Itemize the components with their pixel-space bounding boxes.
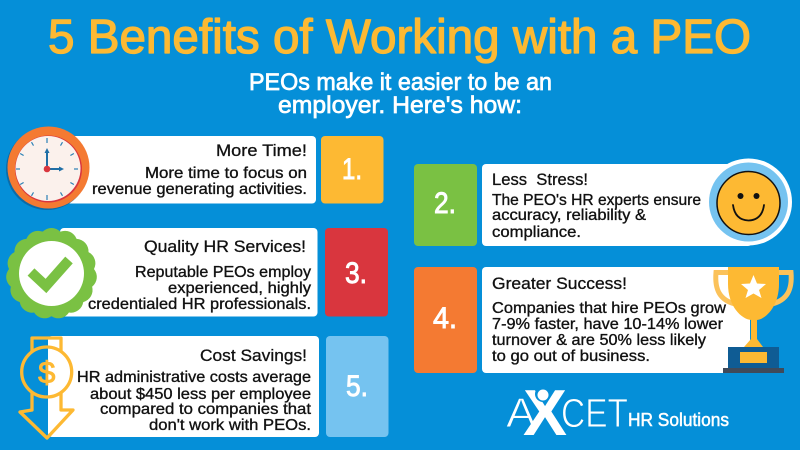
logo: Axcet HR Solutions: CET	[561, 390, 628, 436]
text: quality HR body: experienced, highly	[168, 280, 311, 297]
subtitle	[249, 69, 552, 119]
number box 5	[326, 336, 388, 437]
panel: greater success	[482, 267, 791, 373]
logo: Axcet HR Solutions: X	[523, 376, 567, 449]
text: cost savings body: compared to companies that	[100, 401, 312, 418]
number box 1	[321, 136, 384, 204]
panel: quality HR services	[4, 227, 317, 321]
panel: more time	[6, 126, 316, 210]
logo: Axcet HR Solutions: HR Solutions	[628, 410, 729, 430]
text: more time body: revenue generating activities.	[92, 181, 307, 198]
logo: Axcet HR Solutions: A	[506, 389, 536, 436]
text: less stress body: The PEO's HR experts ensure	[492, 192, 701, 209]
number box 4: 4.	[433, 302, 457, 335]
text: less stress body: compliance.	[492, 224, 581, 241]
icon: dollar down arrow	[20, 338, 73, 438]
number box 2	[414, 164, 477, 246]
number box 5: 5.	[346, 370, 368, 403]
text: cost savings body: HR administrative costs average	[77, 369, 311, 386]
number box 3	[325, 228, 388, 316]
text: greater success body: to go out of business.	[492, 348, 650, 365]
text: quality HR body: Reputable PEOs employ	[135, 264, 311, 281]
text: greater success body	[492, 300, 726, 365]
text: more time body	[92, 165, 307, 198]
heading: quality HR services: Quality HR Services!	[144, 237, 306, 256]
number box 3: 3.	[345, 257, 367, 290]
subtitle: employer. Here's how:	[278, 92, 522, 119]
logo: Axcet HR Solutions	[506, 376, 729, 449]
text: greater success body: 7-9% faster, have 10-14% lower	[492, 316, 724, 333]
panel: cost savings	[20, 336, 319, 438]
text: more time body: More time to focus on	[145, 165, 307, 182]
heading: cost savings: Cost Savings!	[200, 346, 307, 365]
icon: green check badge	[4, 227, 99, 321]
number box 4	[414, 267, 477, 373]
icon: clock	[6, 126, 90, 210]
text: quality HR body	[88, 264, 311, 313]
text: quality HR body: credentialed HR professionals.	[88, 296, 311, 313]
panel: less stress	[482, 158, 792, 246]
heading: greater success: Greater Success!	[492, 274, 627, 293]
heading: less stress: Less Stress!	[492, 170, 588, 189]
number box 1: 1.	[342, 153, 362, 186]
text: greater success body: Companies that hire PEOs grow	[492, 300, 726, 317]
text: cost savings body	[77, 369, 312, 434]
subtitle: PEOs make it easier to be an	[249, 69, 552, 96]
text: less stress body: accuracy, reliability &	[492, 207, 646, 224]
text: greater success body: turnover & are 50% less likely	[492, 332, 706, 349]
number box 2: 2.	[434, 187, 456, 220]
icon: trophy	[716, 267, 791, 373]
text: cost savings body: about $450 less per employee	[90, 386, 311, 403]
icon: dollar down arrow: $	[38, 355, 55, 390]
heading: more time: More Time!	[216, 141, 307, 160]
icon: smiley	[705, 158, 792, 246]
text: less stress body	[492, 192, 701, 241]
text: cost savings body: don't work with PEOs.	[149, 417, 311, 434]
title: 5 Benefits of Working with a PEO	[48, 11, 751, 64]
